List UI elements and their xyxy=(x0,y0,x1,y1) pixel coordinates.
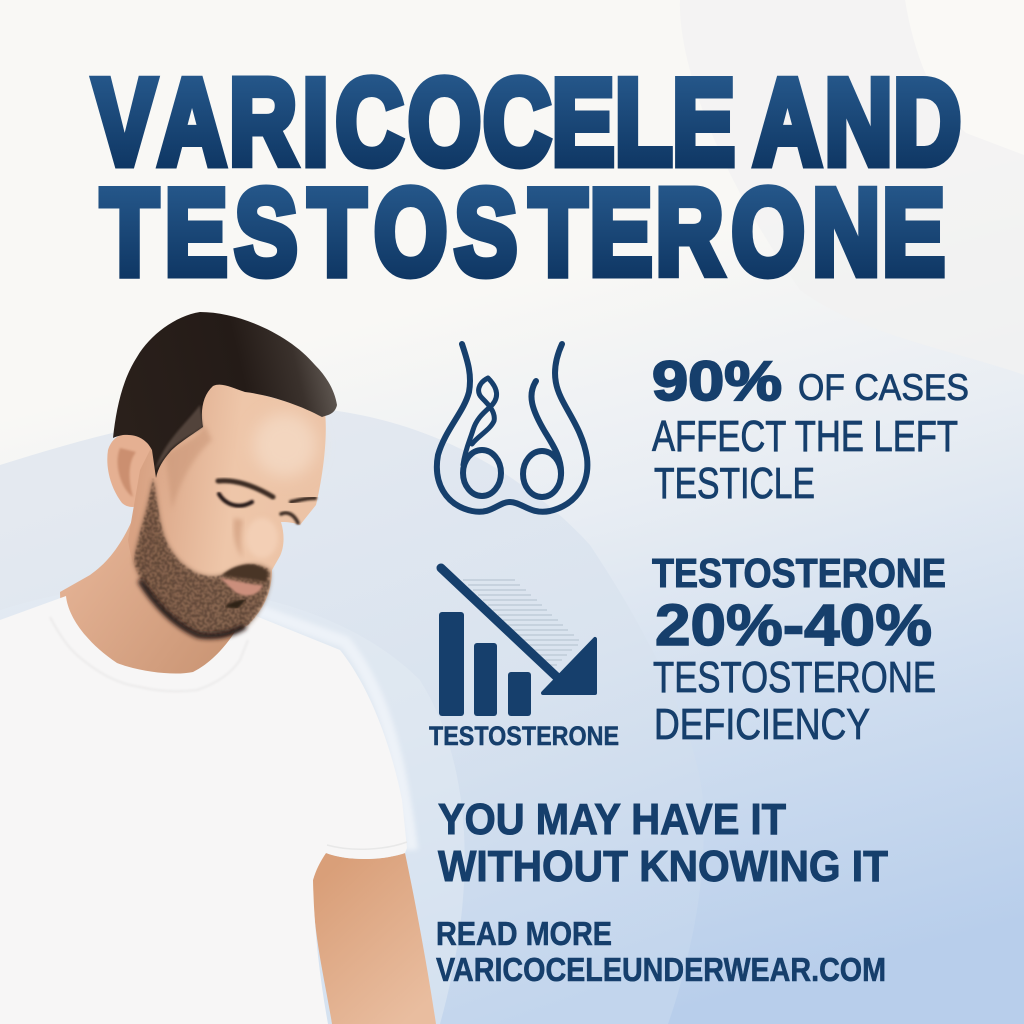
stat: testosterone deficiency: TESTOSTERONE xyxy=(653,653,936,702)
left twisted cord xyxy=(463,378,497,465)
read more link: VARICOCELEUNDERWEAR.COM xyxy=(436,951,886,988)
face xyxy=(128,382,326,635)
right testicle xyxy=(523,451,561,497)
stat: testosterone deficiency: TESTOSTERONE xyxy=(652,550,946,596)
callout: WITHOUT KNOWING IT xyxy=(438,842,888,891)
collar xyxy=(50,617,248,691)
icon: scrotum with varicocele xyxy=(437,344,587,512)
arrow xyxy=(441,568,560,680)
chart label: TESTOSTERONE xyxy=(429,721,619,751)
eyebrows and eyes xyxy=(218,481,273,497)
arm xyxy=(313,853,436,1024)
hair xyxy=(113,312,337,478)
stat: 90% of cases: 90% xyxy=(652,349,782,412)
man in white t-shirt xyxy=(0,312,436,1024)
stat: 90% of cases: OF CASES xyxy=(798,367,969,408)
right cord xyxy=(531,381,561,475)
title: VARICOCELE AND xyxy=(93,54,961,191)
face shading xyxy=(253,413,317,477)
read more link xyxy=(436,915,886,988)
t-shirt xyxy=(0,596,407,1024)
neck xyxy=(60,500,252,692)
left testicle xyxy=(463,450,501,496)
read more link: READ MORE xyxy=(436,915,612,952)
shoulder halo xyxy=(246,606,412,850)
stat: 90% of cases xyxy=(652,349,969,508)
title: TESTOSTERONE xyxy=(101,164,945,301)
beard xyxy=(134,478,270,636)
title xyxy=(93,54,961,301)
stat: testosterone deficiency: 20%-40% xyxy=(655,593,932,658)
stat: testosterone deficiency xyxy=(652,550,946,749)
callout: YOU MAY HAVE IT xyxy=(438,795,786,844)
hatching xyxy=(463,580,579,665)
ear xyxy=(107,433,158,507)
sleeve hem xyxy=(327,842,407,849)
icon: falling testosterone chart xyxy=(429,568,619,751)
stat: testosterone deficiency: DEFICIENCY xyxy=(654,700,870,749)
bars xyxy=(439,612,464,716)
callout xyxy=(438,795,888,891)
outer outline xyxy=(437,344,587,512)
stat: 90% of cases: TESTICLE xyxy=(654,459,815,508)
